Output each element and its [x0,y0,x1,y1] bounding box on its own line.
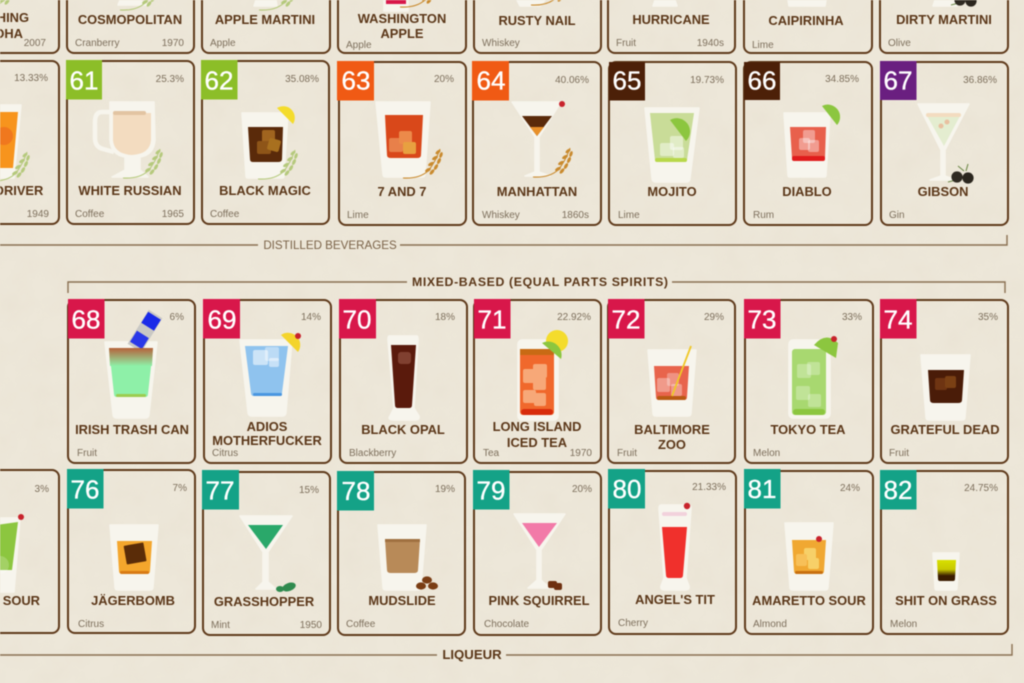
card 76 jagerbomb [67,469,195,633]
icon: tokyo tea glass [789,336,838,418]
card 72 baltimore zoo [608,299,735,463]
card: hurricane: HURRICANE [632,12,710,27]
card 74 grateful dead: Fruit [889,448,909,459]
card 81 amaretto sour: AMARETTO SOUR [752,593,867,608]
icon: mudslide glass [378,525,438,590]
card 81 amaretto sour [744,469,873,634]
card: washington apple: APPLE [381,26,424,41]
badge 67: 67 [884,66,912,96]
card 72 baltimore zoo: 29% [704,312,724,323]
card 76 jagerbomb: JÄGERBOMB [91,593,175,608]
badge 76: 76 [71,474,99,504]
card 79 pink squirrel: Chocolate [484,619,529,630]
badge 63 [337,61,374,100]
card 78 mudslide: Coffee [346,619,376,630]
card: cosmopolitan: Cranberry [75,38,119,49]
card 62 black magic: 35.08% [285,74,319,85]
icon: diablo glass [784,105,840,177]
card 76 jagerbomb: 7% [173,483,187,494]
badge 64 [472,61,509,100]
card 82 shit on grass: 24.75% [964,483,998,494]
card 73 tokyo tea: TOKYO TEA [771,422,845,437]
card 68 irish trash can [68,299,195,463]
badge 61: 61 [70,66,98,96]
card 77 grasshopper: 15% [299,485,319,496]
card 79 pink squirrel: 20% [572,484,592,495]
badge 66: 66 [748,66,776,96]
card 77 grasshopper: GRASSHOPPER [214,594,315,609]
card: caipirinha [744,0,872,53]
card 65 mojito: MOJITO [647,184,697,199]
card 60 screwdriver: 1949 [27,209,49,220]
badge 72: 72 [612,304,640,334]
card 80 angel's tit: ANGEL'S TIT [635,592,715,607]
card 69 adios motherfucker [203,299,331,463]
badge 64: 64 [477,66,505,96]
badge 78: 78 [342,476,370,506]
row 1: partial cards at top [0,0,1008,53]
card 72 baltimore zoo: BALTIMORE [634,422,710,437]
card 63 7 and 7: Lime [347,210,369,221]
badge 73 [744,299,780,338]
row 3: cards 68 to 74 [68,299,1008,463]
badge 72 [608,299,644,338]
badge 81: 81 [748,474,776,504]
card 77 grasshopper: Mint [211,620,230,631]
card 61 white russian [66,60,194,224]
badge 68 [68,299,104,338]
card 80 angel's tit: Cherry [618,618,648,629]
badge 62: 62 [205,66,233,96]
card: hurricane: Fruit [616,38,636,49]
card: partial, aloha: 2007 [24,38,46,49]
badge 79: 79 [477,476,505,506]
card 82 shit on grass [880,470,1008,634]
icon: black magic glass [242,106,295,178]
card: dirty martini [880,0,1008,53]
card: cosmopolitan: COSMOPOLITAN [78,12,182,27]
card 66 diablo: Rum [753,210,774,221]
card 71 long island iced tea [474,299,601,463]
card 68 irish trash can: IRISH TRASH CAN [75,422,189,437]
card 74 grateful dead: 35% [978,312,998,323]
card 70 black opal: 18% [435,312,455,323]
icon: baltimore zoo glass [648,346,696,416]
icon: irish coffee mug [95,102,155,177]
card: rusty nail: RUSTY NAIL [498,13,576,28]
badge 77: 77 [206,476,234,506]
card 73 tokyo tea: Melon [753,448,780,459]
card 71 long island iced tea: Tea [483,448,500,459]
card 61 white russian: 25.3% [156,74,184,85]
card 73 tokyo tea [744,299,873,463]
icon: jagerbomb glass [110,525,158,590]
card 64 manhattan: Whiskey [482,210,520,221]
card: caipirinha: CAIPIRINHA [768,13,844,28]
card 76 jagerbomb: Citrus [78,619,104,630]
badge 61 [66,60,102,100]
card 60 screwdriver [0,61,59,224]
badge 81 [744,469,780,508]
icon: grasshopper martini glass [240,516,297,593]
card: caipirinha: Lime [752,40,774,51]
card: partial, aloha [0,0,59,53]
card 68 irish trash can: Fruit [77,448,97,459]
icon: manhattan martini glass [512,101,565,176]
card: cosmopolitan [67,0,194,53]
badge 80 [608,469,645,508]
section bracket: mixed-based [68,275,1005,293]
badge 71: 71 [478,304,506,334]
card: washington apple [338,0,466,53]
card 75 partial sour: 3% [35,484,49,495]
card 69 adios motherfucker: 14% [301,312,321,323]
card 61 white russian: Coffee [75,209,105,220]
card 70 black opal: BLACK OPAL [361,422,445,437]
card 65 mojito: Lime [618,210,640,221]
badge 66 [744,62,780,100]
card 67 gibson: GIBSON [918,184,968,199]
badge 63: 63 [342,66,370,96]
badge 67 [880,61,916,100]
badge 77 [202,470,239,510]
card 64 manhattan: MANHATTAN [497,184,577,199]
card: apple martini: Apple [210,38,236,49]
card 60 screwdriver: 13.33% [14,73,48,84]
section bracket: liqueur: LIQUEUR [442,647,502,662]
card 65 mojito [609,62,736,225]
card 82 shit on grass: SHIT ON GRASS [895,593,997,608]
card 77 grasshopper: 1950 [300,620,322,631]
card 75 partial sour [0,470,59,633]
badge 71 [474,299,510,338]
badge 69: 69 [208,304,236,334]
card: hurricane: 1940s [697,38,724,49]
card 69 adios motherfucker: Citrus [212,448,238,459]
card 67 gibson [880,61,1008,225]
card: cosmopolitan: 1970 [162,38,184,49]
card 61 white russian: 1965 [162,209,184,220]
icon: pink squirrel martini glass [514,514,565,590]
badge 69 [203,299,240,338]
card 71 long island iced tea: 1970 [570,448,592,459]
card: dirty martini: DIRTY MARTINI [896,12,992,27]
card 63 7 and 7: 7 AND 7 [378,184,426,199]
section bracket: liqueur [0,644,1012,662]
badge 74 [880,299,916,338]
card 74 grateful dead [880,299,1008,463]
card 78 mudslide: 19% [435,484,455,495]
badge 65 [609,62,645,100]
icon: 7 and 7 glass [376,102,430,177]
card 62 black magic: BLACK MAGIC [219,183,311,198]
card 69 adios motherfucker: MOTHERFUCKER [212,433,322,448]
section bracket: distilled beverages: DISTILLED BEVERAGES [263,239,397,252]
card 66 diablo [744,62,872,225]
card 62 black magic [201,60,329,224]
card: rusty nail [474,0,601,53]
card 67 gibson: 36.86% [963,75,997,86]
card 72 baltimore zoo: ZOO [658,437,686,452]
card 68 irish trash can: 6% [170,312,184,323]
icon: black opal pilsner [388,336,419,420]
card 73 tokyo tea: 33% [842,312,862,323]
card 64 manhattan: 1860s [562,210,589,221]
row 4: cards 75 to 82 [0,469,1008,635]
card 63 7 and 7 [337,61,466,225]
card 70 black opal [339,299,467,463]
card 65 mojito: 19.73% [690,75,724,86]
card: rusty nail: Whiskey [482,38,520,49]
card 78 mudslide: MUDSLIDE [368,593,436,608]
icon: grateful dead glass [921,355,970,420]
card 71 long island iced tea: ICED TEA [507,435,567,450]
card 71 long island iced tea: 22.92% [557,312,591,323]
card 64 manhattan: 40.06% [555,75,589,86]
card 63 7 and 7: 20% [434,74,454,85]
card 82 shit on grass: Melon [890,619,917,630]
section bracket: distilled beverages [0,235,1007,252]
icon: gibson martini glass [918,104,969,180]
badge 76 [67,469,104,508]
badge 79 [473,470,510,510]
card 67 gibson: Gin [889,210,905,221]
icon: angel's tit pilsner [659,503,691,590]
icon: irish trash can glass with can [105,310,162,418]
badge 70 [339,299,376,338]
card 81 amaretto sour: Almond [753,619,787,630]
card 71 long island iced tea: LONG ISLAND [493,419,581,434]
card 72 baltimore zoo: Fruit [617,448,637,459]
card 64 manhattan [472,61,601,225]
badge 62 [201,60,238,100]
card 81 amaretto sour: 24% [840,483,860,494]
card: dirty martini: Olive [888,38,911,49]
card: washington apple: Apple [346,40,372,51]
card 74 grateful dead: GRATEFUL DEAD [890,422,1000,437]
icon: long island iced tea glass [518,330,568,420]
card 80 angel's tit: 21.33% [692,482,726,493]
card 61 white russian: WHITE RUSSIAN [78,183,182,198]
card 78 mudslide [337,471,465,635]
card 79 pink squirrel: PINK SQUIRREL [488,593,590,608]
badge 82 [880,470,916,510]
section bracket: mixed-based: MIXED-BASED (EQUAL PARTS SPIRITS) [412,275,668,289]
badge 78 [337,471,374,510]
card 66 diablo: DIABLO [782,184,832,199]
badge 80: 80 [613,474,641,504]
icon: mojito glass [645,108,699,182]
card 75 partial sour: SOUR [3,593,41,608]
badge 70: 70 [343,304,371,334]
card 69 adios motherfucker: ADIOS [247,419,288,434]
card 79 pink squirrel [473,470,601,635]
card: hurricane [608,0,735,53]
badge 82: 82 [884,475,912,505]
card 80 angel's tit [608,469,736,634]
badge 65: 65 [613,66,641,96]
card: apple martini [202,0,330,53]
card 66 diablo: 34.85% [825,74,859,85]
card 77 grasshopper [202,470,330,635]
badge 68: 68 [72,304,100,334]
card: apple martini: APPLE MARTINI [215,12,315,27]
card 62 black magic: Coffee [210,209,240,220]
row 2: cards 60 to 67 [0,60,1008,225]
badge 74: 74 [884,304,912,334]
card: washington apple: WASHINGTON [358,11,446,26]
icon: amaretto sour glass [785,523,833,590]
card 70 black opal: Blackberry [349,448,396,459]
badge 73: 73 [748,304,776,334]
icon: adios blue glass [240,333,301,416]
icon: shit on grass shot [933,553,959,590]
